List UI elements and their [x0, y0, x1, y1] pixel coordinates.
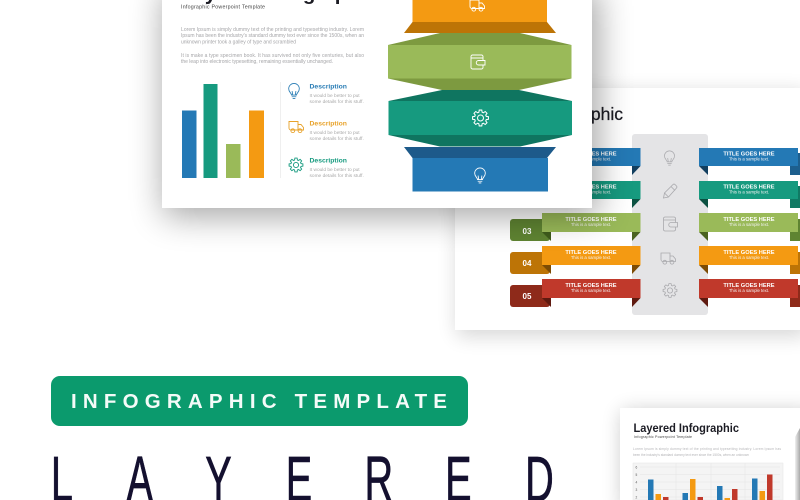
column icons	[661, 151, 678, 297]
column chart: 2	[636, 496, 638, 500]
left ribbons: This is a sample text.	[571, 255, 611, 260]
left tabs: 04	[523, 259, 532, 268]
right ribbons: This is a sample text.	[729, 222, 769, 227]
left ribbons: This is a sample text.	[571, 222, 611, 227]
body text: It is make a type specimen book. It has survived not only five centuries, but also	[181, 53, 364, 59]
right ribbons: This is a sample text.	[729, 288, 769, 293]
layered stack: teal layer	[388, 90, 572, 146]
body text: the leap into electronic typesetting, remaining essentially unchanged.	[181, 59, 333, 65]
description: blue: some details for this stuff.	[310, 99, 364, 105]
description: teal	[289, 158, 364, 179]
slide title: Layered Infographic	[634, 421, 739, 435]
right tabs	[790, 153, 800, 307]
description: blue: It would be better to put	[310, 93, 360, 99]
left ribbons: TITLE GOES HERE	[565, 283, 617, 289]
left ribbons: This is a sample text.	[571, 156, 611, 162]
right ribbons: TITLE GOES HERE	[723, 283, 775, 289]
badge: infographic template	[51, 376, 468, 426]
description: blue: Description	[310, 84, 347, 90]
panel: main slide shadow	[164, 0, 598, 216]
body text	[633, 447, 781, 457]
badge: infographic template: INFOGRAPHIC TEMPLATE	[71, 390, 447, 413]
slide subtitle: Infographic Powerpoint Template	[181, 4, 265, 10]
body text: been the industry's standard dummy text ever since the 1500s, when an unknown	[633, 453, 749, 457]
panel: bar chart slide	[620, 408, 800, 500]
description: teal: Description	[310, 158, 347, 164]
bar chart	[182, 84, 264, 178]
description: orange: Description	[310, 120, 347, 128]
right ribbons: This is a sample text.	[729, 255, 769, 260]
right ribbons: This is a sample text.	[729, 156, 769, 162]
left ribbons: TITLE GOES HERE	[565, 184, 617, 190]
right ribbons: TITLE GOES HERE	[723, 152, 775, 158]
description: orange: some details for this stuff.	[310, 136, 364, 142]
left ribbons: TITLE GOES HERE	[565, 250, 617, 256]
right ribbons: TITLE GOES HERE	[723, 217, 775, 223]
divider	[279, 82, 282, 178]
description: teal: some details for this stuff.	[310, 173, 364, 179]
layered stack: orange layer	[404, 0, 556, 33]
body text: unknown printer took a galley of type and scrambled	[181, 40, 296, 46]
layered stack: blue layer	[404, 147, 556, 192]
column chart: 3	[636, 488, 638, 492]
layered stack: green layer	[388, 33, 572, 90]
description: blue	[289, 83, 364, 105]
right ribbons: TITLE GOES HERE	[723, 184, 775, 190]
left ribbons: This is a sample text.	[571, 190, 611, 194]
body text: Lorem Ipsum is simply dummy text of the printing and typesetting industry. Lorem Ipsum has	[633, 447, 781, 451]
column chart: 6	[636, 466, 638, 470]
left ribbons	[500, 148, 640, 307]
center icon column	[632, 134, 708, 315]
description: orange	[289, 120, 364, 142]
slide title: Layered Infographic	[468, 104, 623, 124]
right ribbons: This is a sample text.	[729, 190, 769, 194]
body text	[181, 27, 364, 65]
left ribbons: TITLE GOES HERE	[565, 152, 617, 158]
left ribbons: TITLE GOES HERE	[565, 217, 617, 223]
slide subtitle: Infographic Powerpoint Template	[634, 435, 692, 439]
right ribbons	[699, 148, 798, 307]
right ribbons: TITLE GOES HERE	[723, 250, 775, 256]
column chart	[633, 463, 783, 500]
left tabs	[510, 219, 551, 307]
left tabs: 05	[523, 292, 532, 301]
left tabs: 03	[523, 227, 532, 236]
body text: Ipsum has been the industry's standard dummy text ever since the 1500s, when an	[181, 33, 364, 39]
next slide edge	[795, 428, 800, 500]
panel: main slide	[162, 0, 592, 208]
body text: Lorem Ipsum is simply dummy text of the printing and typesetting industry. Lorem	[181, 27, 364, 33]
column chart: 4	[636, 480, 638, 484]
description: orange: It would be better to put	[310, 130, 360, 136]
panel: ribbons slide	[455, 88, 800, 336]
column chart: 5	[636, 473, 638, 477]
left ribbons: This is a sample text.	[571, 288, 611, 293]
description: teal: It would be better to put	[310, 167, 360, 173]
